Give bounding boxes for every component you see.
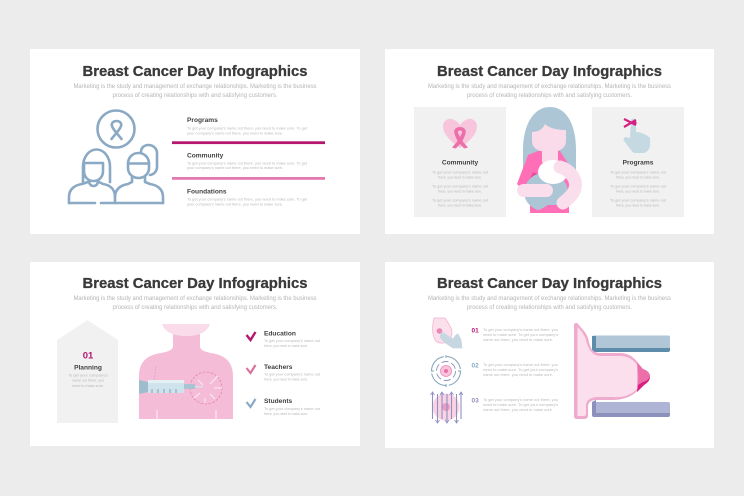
item: teachers (246, 364, 321, 382)
item: teachers: there, you need to make sure. (264, 376, 308, 382)
step 02: 02 (472, 362, 479, 370)
card: programs: To get your company's name out (610, 170, 667, 174)
card: planning: To get your company's (68, 372, 108, 378)
card: planning: name out there, you (72, 378, 104, 382)
item: community: To get your company's name out there, you need to make sure. To get (187, 160, 308, 165)
item: foundations: your company's name out there, you need to make sure. (187, 202, 283, 206)
subtitle (428, 295, 671, 311)
card: community: To get your company's name out (432, 170, 489, 174)
subtitle: Marketing is the study and management of exchange relationships. Marketing is the business (74, 295, 316, 302)
card: programs: To get your company's name out (610, 198, 667, 202)
step 01 (472, 327, 558, 342)
icon: two women with ribbon (69, 110, 163, 203)
subtitle (74, 295, 316, 311)
illustration: torso with syringe (139, 324, 233, 419)
bar: magenta divider (172, 141, 325, 144)
card: community: To get your company's name out (432, 184, 489, 188)
illustration: breast side view with plates (574, 323, 670, 419)
icon: hand examining breast (433, 318, 462, 348)
step 03: name out there, you need to make sure. (483, 407, 553, 412)
step 01: need to make sure. To get your company's (483, 332, 558, 337)
item: programs: Programs (187, 117, 218, 124)
step 03 (472, 397, 558, 412)
item: foundations: To get your company's name out there, you need to make sure. To get (187, 196, 308, 202)
step 03: need to make sure. To get your company's (483, 402, 558, 407)
icon: circular massage arrows (431, 355, 461, 387)
title: Breast Cancer Day Infographics (437, 63, 662, 80)
card: programs: there, you need to make sure. (616, 188, 660, 194)
card: community (414, 107, 506, 217)
item: education: To get your company's name out (264, 338, 321, 343)
item: students (246, 398, 321, 416)
card: community: there, you need to make sure. (438, 202, 482, 208)
panel: numbered steps and breast diagram (385, 262, 714, 448)
card: programs: Programs (623, 160, 654, 166)
item: students: To get your company's name out (264, 406, 321, 411)
icon: heart with ribbon (443, 119, 477, 148)
item: foundations (187, 188, 308, 206)
card: planning: 01 (83, 350, 94, 362)
subtitle: Marketing is the study and management of exchange relationships. Marketing is the business (428, 295, 671, 302)
step 01: 01 (472, 328, 479, 334)
bar: pink divider (172, 177, 325, 180)
illustration: woman self-examining (517, 107, 576, 213)
card: community: there, you need to make sure. (438, 174, 482, 180)
item: students: there, you need to make sure. (264, 411, 308, 416)
step 03: 03 (472, 398, 479, 404)
subtitle: process of creating relationships with and satisfying customers. (112, 304, 278, 311)
item: community: your company's name out there, you need to make sure. (187, 165, 283, 170)
panel: community and programs (385, 49, 714, 234)
card: planning (57, 320, 118, 423)
subtitle: Marketing is the study and management of exchange relationships. Marketing is the business (74, 83, 316, 90)
item: programs: To get your company's name out there, you need to make sure. To get (187, 125, 308, 130)
step 02 (472, 362, 558, 377)
subtitle: Marketing is the study and management of exchange relationships. Marketing is the business (428, 83, 671, 90)
card: planning: Planning (74, 364, 102, 372)
item: foundations: Foundations (187, 188, 227, 196)
subtitle: process of creating relationships with and satisfying customers. (467, 92, 632, 99)
subtitle (428, 83, 671, 99)
card: programs: there, you need to make sure. (616, 174, 660, 180)
card: community: Community (442, 160, 478, 166)
card: programs (592, 107, 684, 217)
item: teachers: To get your company's name out (264, 372, 321, 376)
subtitle (74, 83, 316, 99)
subtitle: process of creating relationships with and satisfying customers. (112, 92, 278, 99)
title: Breast Cancer Day Infographics (82, 275, 308, 292)
item: teachers: Teachers (264, 364, 293, 371)
item: programs: your company's name out there, you need to make sure. (187, 130, 283, 135)
card: programs: there, you need to make sure. (616, 202, 660, 208)
icon: vertical massage arrows (430, 392, 463, 423)
step 02: name out there, you need to make sure. (483, 372, 553, 377)
panel: planning and checklist (30, 262, 360, 446)
item: education: there, you need to make sure. (264, 343, 308, 348)
step 03: To get your company's name out there, you (483, 397, 558, 402)
item: students: Students (264, 398, 293, 405)
step 01: name out there, you need to make sure. (483, 337, 553, 342)
card: community: To get your company's name out (432, 198, 489, 202)
item: education: Education (264, 330, 296, 338)
card: community: there, you need to make sure. (438, 188, 482, 194)
panel: programs, community, foundations (30, 49, 360, 234)
step 01: To get your company's name out there, you (483, 327, 558, 332)
item: programs (187, 117, 308, 135)
card: planning: need to make sure. (72, 383, 104, 388)
subtitle: process of creating relationships with and satisfying customers. (467, 304, 632, 311)
item: community (187, 152, 308, 170)
step 02: To get your company's name out there, you (483, 362, 558, 367)
icon: finger with ribbon (624, 118, 650, 153)
card: programs: To get your company's name out (610, 184, 667, 188)
step 02: need to make sure. To get your company's (483, 367, 558, 372)
title: Breast Cancer Day Infographics (437, 275, 662, 292)
item: education (246, 330, 321, 348)
item: community: Community (187, 152, 224, 160)
title: Breast Cancer Day Infographics (82, 63, 308, 80)
